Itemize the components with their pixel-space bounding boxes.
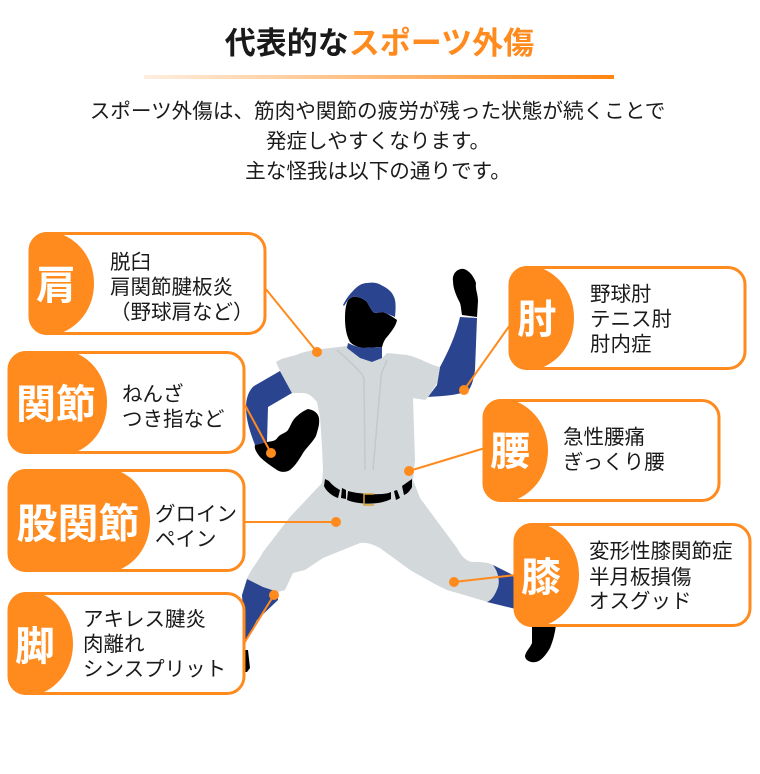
intro text: 発症しやすくなります。 bbox=[266, 130, 490, 153]
icon: throwing arm sleeve bbox=[428, 317, 477, 397]
panel: elbow: テニス肘 bbox=[590, 308, 672, 331]
panel: waist: 急性腰痛 bbox=[563, 426, 645, 449]
icon: undershirt collar bbox=[347, 343, 382, 362]
icon: throwing hand bbox=[453, 269, 478, 317]
icon: uniform bbox=[247, 346, 499, 602]
panel: joint: ねんざ bbox=[122, 382, 184, 406]
leader line: joint bbox=[245, 405, 276, 458]
icon: belt bbox=[324, 479, 412, 504]
icon: left shoe bbox=[244, 650, 250, 672]
panel: shoulder bbox=[29, 232, 265, 335]
panel: leg bbox=[8, 592, 244, 695]
panel: hip joint: ペイン bbox=[155, 528, 216, 551]
panel: joint bbox=[8, 351, 244, 454]
panel: leg: シンスプリット bbox=[83, 658, 226, 681]
icon: jersey placket bbox=[337, 350, 387, 470]
panel: hip joint: グロイン bbox=[155, 503, 237, 526]
panel: waist: ぎっくり腰 bbox=[563, 451, 665, 474]
panel: elbow: 肘内症 bbox=[590, 333, 652, 356]
baseball player figure bbox=[242, 269, 556, 672]
panel: leg: 肉離れ bbox=[83, 633, 144, 656]
panel: elbow: 野球肘 bbox=[590, 283, 652, 306]
leader line: hip bbox=[245, 517, 341, 527]
panel: waist: 腰 bbox=[490, 430, 530, 474]
panel: leg: 脚 bbox=[15, 625, 55, 669]
panel: knee: 半月板損傷 bbox=[589, 566, 692, 589]
icon: glove bbox=[255, 409, 319, 472]
panel: shoulder: 肩 bbox=[36, 264, 76, 308]
panel: shoulder: 脱臼 bbox=[110, 251, 151, 274]
leader line: elbow bbox=[459, 325, 510, 395]
panel: joint: つき指など bbox=[122, 408, 224, 431]
intro text bbox=[90, 100, 665, 183]
title: 代表的なスポーツ外傷 bbox=[225, 26, 534, 61]
icon: right sock bbox=[487, 565, 520, 610]
panel: shoulder: 肩関節腱板炎 bbox=[110, 276, 233, 299]
leader line: leg bbox=[243, 590, 279, 645]
panel: leg: アキレス腱炎 bbox=[83, 608, 206, 631]
panel: waist bbox=[483, 399, 719, 502]
panel: knee: 膝 bbox=[521, 556, 561, 600]
panel: hip joint: 股関節 bbox=[16, 501, 140, 547]
title underline bbox=[144, 75, 614, 79]
panel: shoulder: （野球肩など） bbox=[110, 301, 254, 324]
panel: knee: 変形性膝関節症 bbox=[589, 540, 732, 563]
icon: cap bbox=[343, 283, 396, 317]
leader line: shoulder bbox=[265, 288, 322, 357]
intro text: 主な怪我は以下の通りです。 bbox=[245, 160, 511, 183]
icon: left sock bbox=[242, 579, 278, 643]
panel: knee bbox=[514, 523, 750, 627]
icon: head bbox=[345, 297, 397, 348]
icon: belt buckle bbox=[364, 494, 374, 505]
panel: elbow bbox=[509, 266, 745, 370]
panel: elbow: 肘 bbox=[517, 298, 557, 342]
icon: right shoe bbox=[525, 625, 556, 662]
panel: joint: 関節 bbox=[16, 383, 96, 427]
icon: glove arm sleeve bbox=[246, 371, 292, 445]
panel: knee: オスグッド bbox=[589, 590, 692, 613]
intro text: スポーツ外傷は、筋肉や関節の疲労が残った状態が続くことで bbox=[90, 100, 665, 123]
leader line: waist bbox=[404, 448, 485, 476]
leader line: knee bbox=[449, 575, 516, 587]
panel: hip joint bbox=[8, 469, 244, 572]
